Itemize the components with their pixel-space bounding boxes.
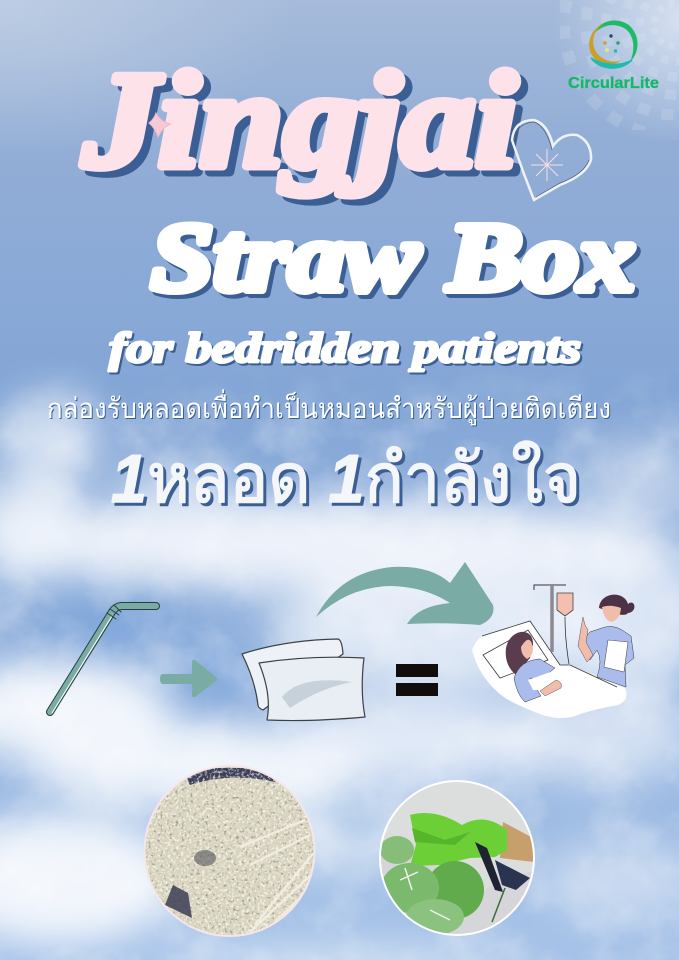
logo wordmark: CircularLite [568, 75, 659, 92]
logo: CircularLite [568, 21, 659, 92]
title: Jingjai: Jingjai [89, 50, 524, 202]
title: Straw Box: Straw Box [151, 204, 635, 311]
slogan: 1หลอด 1กำลังใจ [114, 443, 584, 520]
sparkle on J [149, 113, 170, 137]
title: Straw Box: Straw Box [155, 208, 639, 315]
curved arrow [316, 562, 493, 625]
patient [506, 632, 570, 702]
slogan: 1หลอด 1กำลังใจ [111, 440, 581, 517]
Thai subtitle: กล่องรับหลอดเพื่อทำเป็นหมอนสำหรับผู้ป่วยติดเตียง [48, 390, 612, 427]
subtitle: for bedridden patients: for bedridden patients [109, 326, 581, 372]
photo: green pillows [379, 780, 536, 936]
Thai subtitle: กล่องรับหลอดเพื่อทำเป็นหมอนสำหรับผู้ป่วยติดเตียง [47, 389, 611, 426]
IV bag [557, 593, 573, 616]
equals sign [396, 664, 438, 696]
title: Jingjai: Jingjai [82, 44, 517, 196]
icon: pillows [242, 639, 365, 721]
icon: bendy straw [50, 605, 156, 713]
icon: silver heart [512, 120, 591, 200]
subtitle: for bedridden patients: for bedridden patients [111, 328, 583, 374]
photo: plastic pellets [140, 762, 320, 942]
IV stand [534, 585, 569, 664]
arrow: straw to pillow [160, 660, 217, 697]
nurse [578, 595, 634, 687]
white bed [472, 621, 626, 718]
illustration: nurse and patient [472, 585, 634, 718]
checker pattern corner [564, 0, 679, 137]
pillow [483, 630, 548, 678]
logo mark [589, 21, 638, 68]
